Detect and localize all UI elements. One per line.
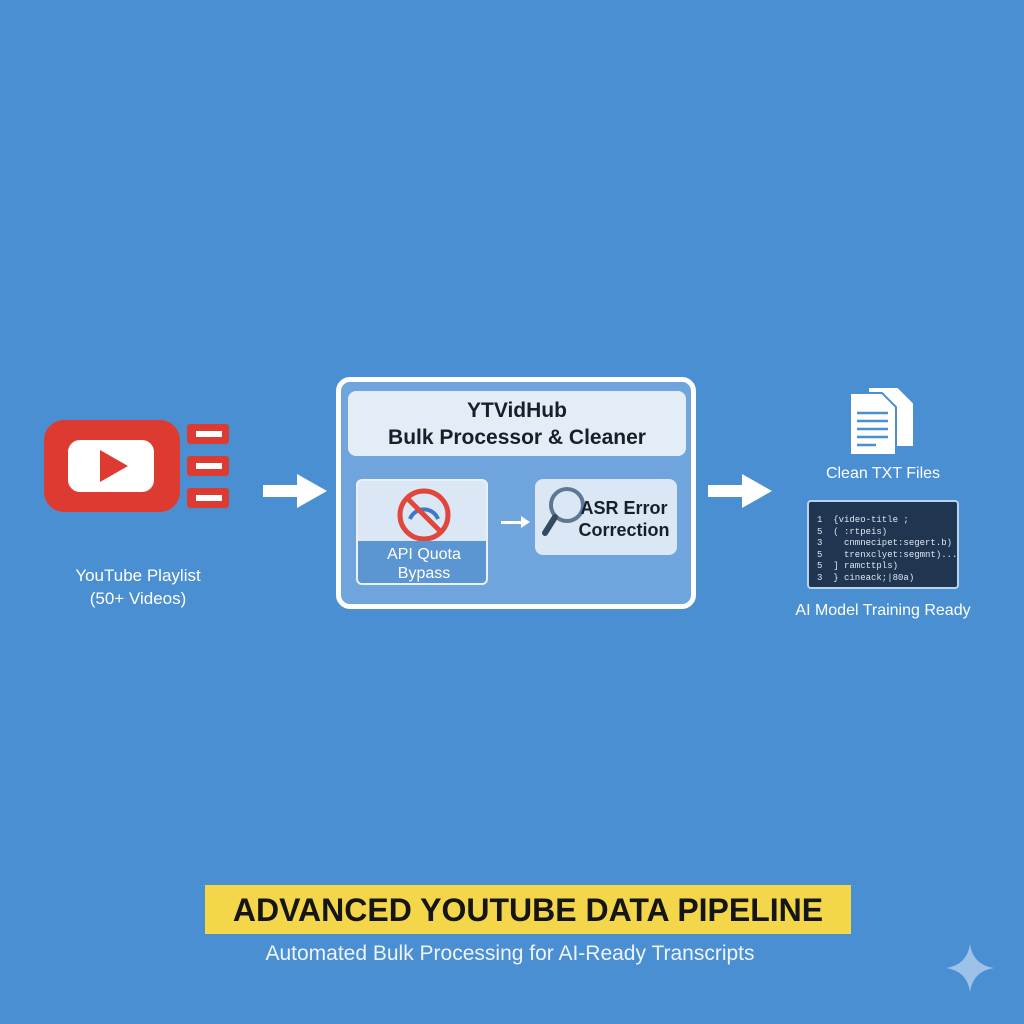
icon: youtube playlist — [44, 420, 229, 512]
heading: YTVidHub — [348, 391, 686, 456]
icon: sparkle — [946, 944, 994, 992]
title banner: ADVANCED YOUTUBE DATA PIPELINE — [233, 892, 823, 928]
text: clean txt files: Clean TXT Files — [826, 465, 940, 482]
subtitle: Automated Bulk Processing for AI-Ready Transcripts — [265, 942, 755, 965]
heading: YTVidHub: Bulk Processor & Cleaner — [388, 426, 646, 449]
sub-panel: API quota bypass: API Quota — [387, 546, 461, 563]
sub-panel: ASR error correction — [535, 479, 677, 555]
text: youtube playlist label: (50+ Videos) — [90, 589, 186, 608]
text: ai model ready: AI Model Training Ready — [795, 602, 971, 619]
sub-panel: ASR error correction: ASR Error — [580, 498, 668, 518]
sub-panel: ASR error correction: Correction — [578, 520, 670, 540]
panel: main processor — [336, 377, 696, 609]
arrow 2 — [708, 474, 772, 508]
sub-panel: API quota bypass — [356, 479, 488, 585]
arrow: small — [501, 516, 530, 528]
text: youtube playlist label: YouTube Playlist — [75, 566, 201, 585]
title banner — [205, 885, 851, 934]
arrow 1 — [263, 474, 327, 508]
heading: YTVidHub: YTVidHub — [467, 399, 567, 422]
code window: 1 {video-title ; 5 ( :rtpeis) 3 cnmnecipet:segert.b) 5 trenxclyet:segmnt)... 5 ] ramcttpls) 3 } cineack;|80a) — [817, 515, 957, 582]
icon: documents — [851, 388, 913, 454]
sub-panel: API quota bypass: Bypass — [398, 565, 450, 582]
text: youtube playlist label — [75, 566, 201, 608]
